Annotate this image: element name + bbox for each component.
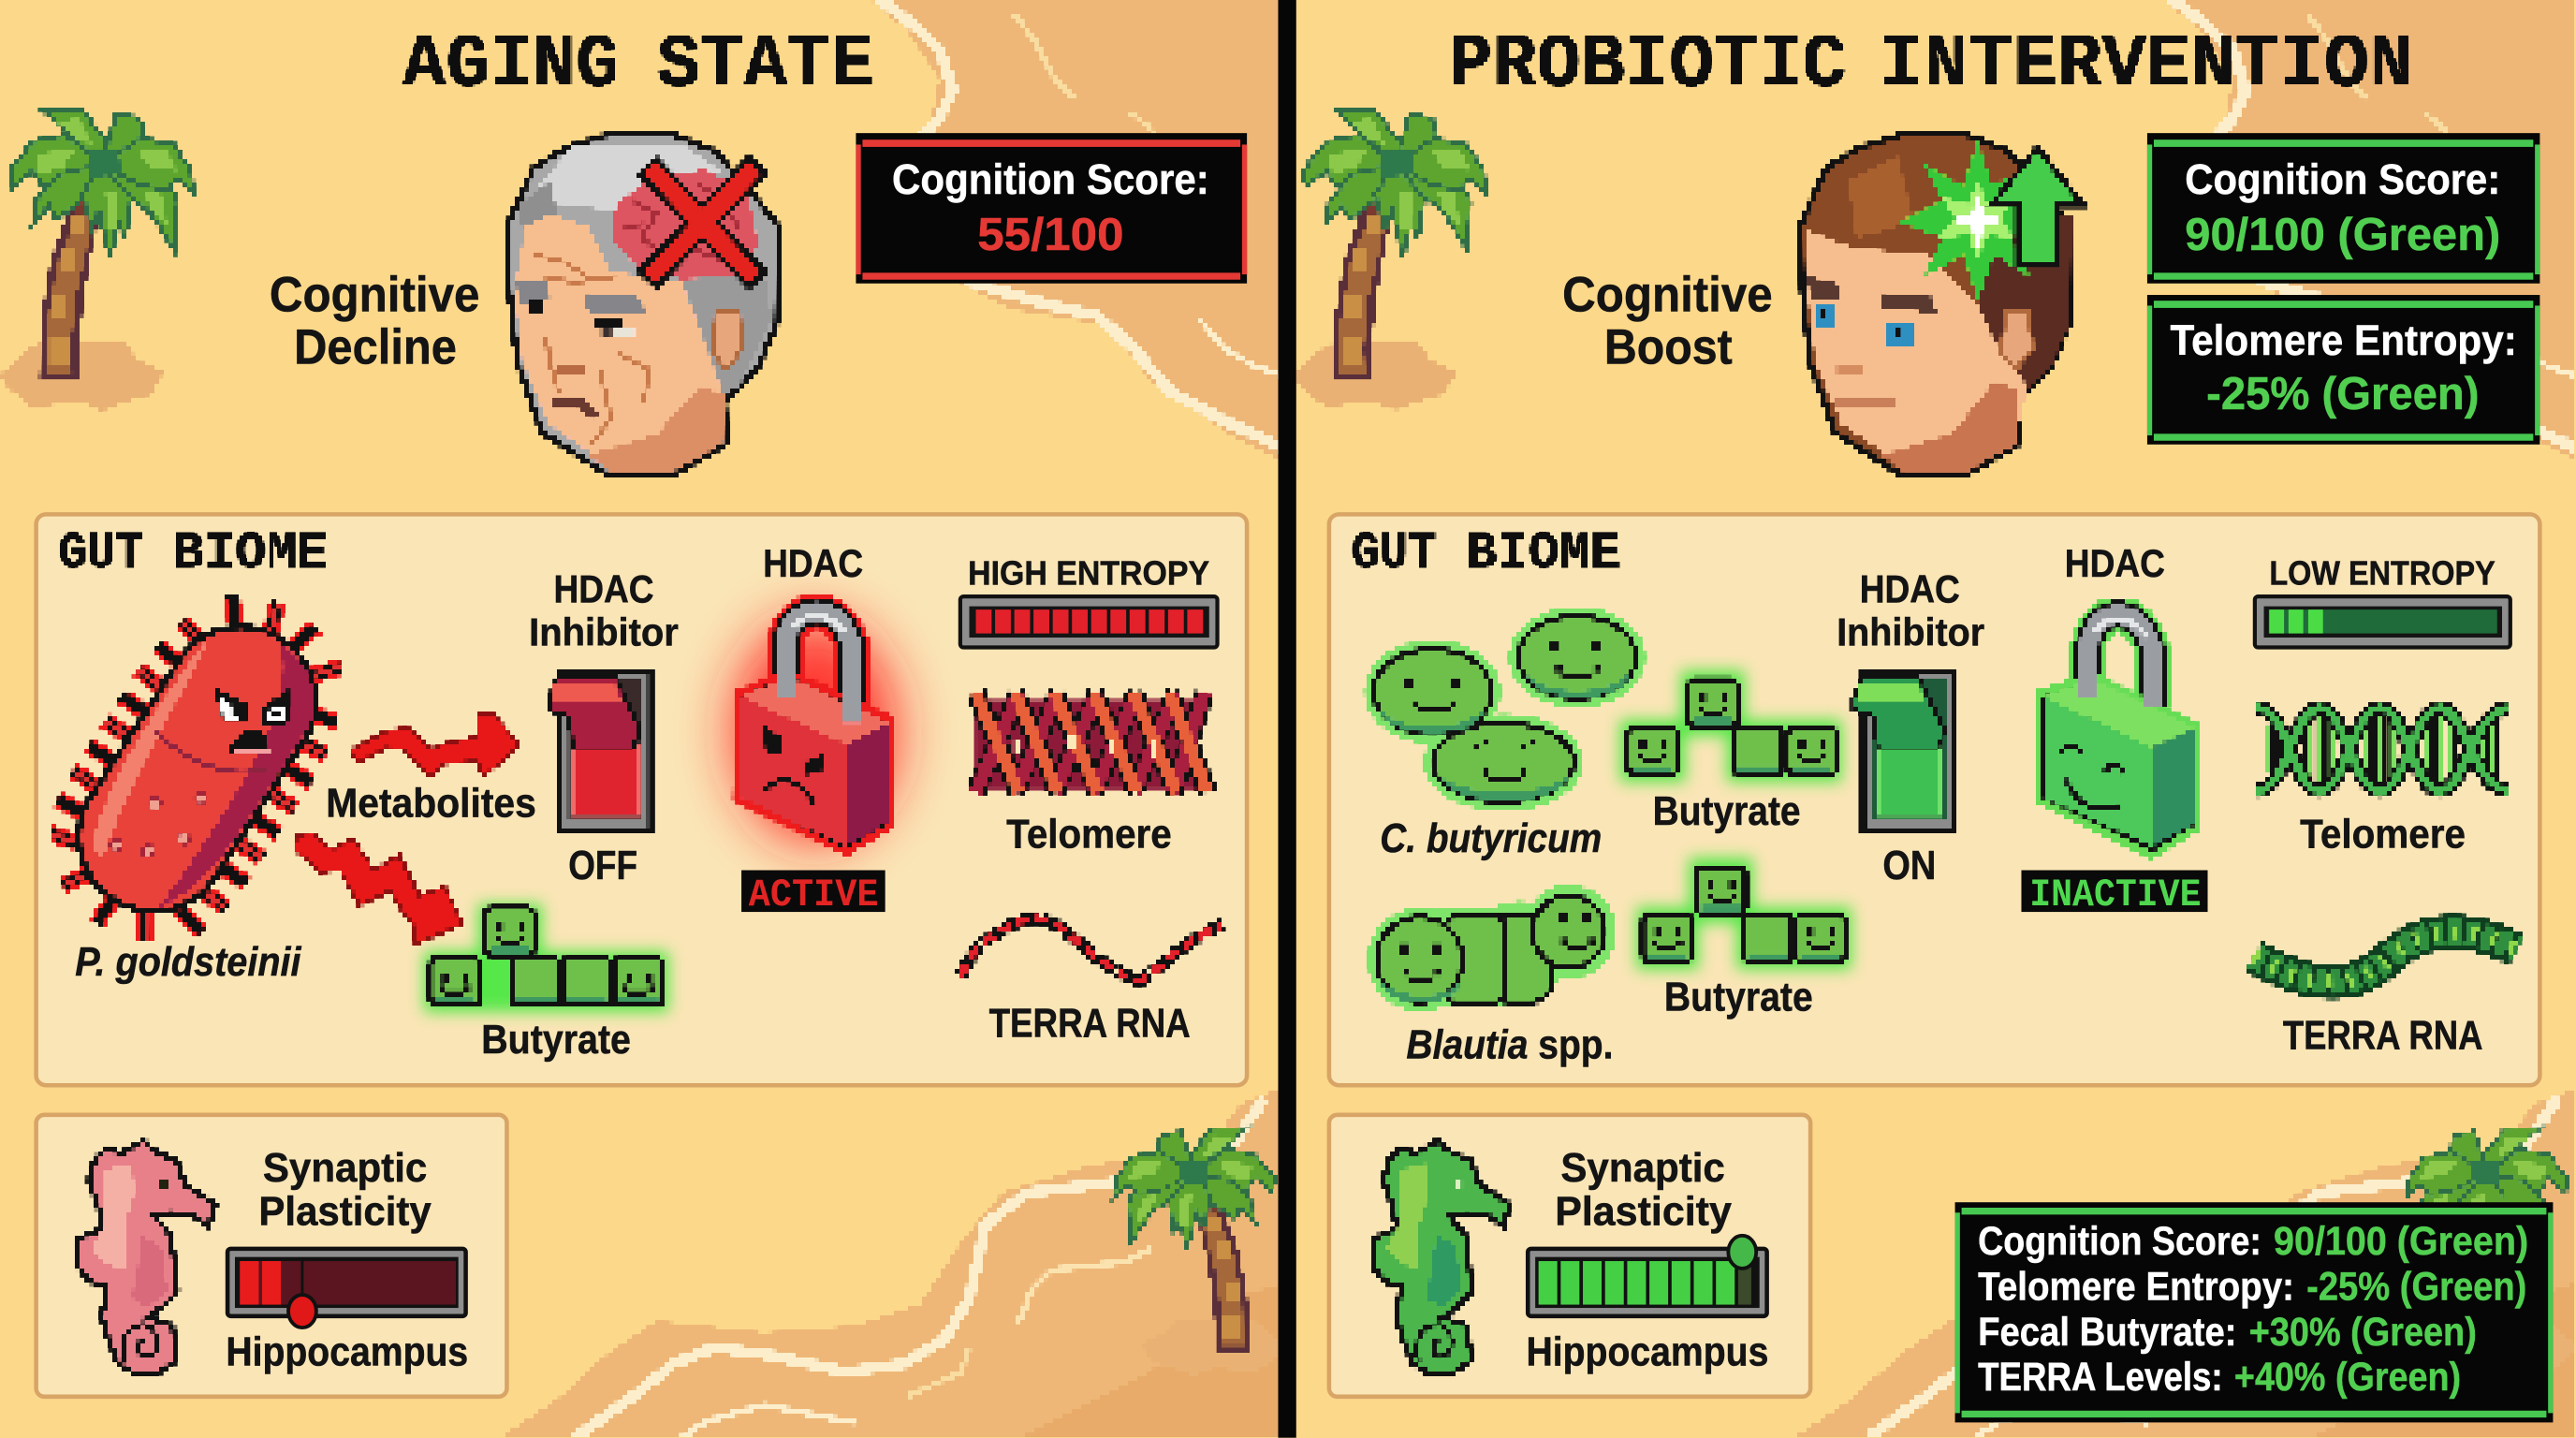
score card: cognition score 55/100: [856, 133, 1247, 284]
title: aging state: STATE: [657, 23, 874, 109]
label: blautia spp.: Blautia spp.: [1406, 1021, 1614, 1067]
summary box: intervention results: [1955, 1202, 2553, 1422]
glow: butyrate chains: [1620, 670, 1852, 970]
title: probiotic intervention: INTERVENTION: [1880, 23, 2413, 109]
label: butyrate: Butyrate: [481, 1017, 631, 1063]
label: on: ON: [1882, 843, 1936, 888]
score card: cognition score 90/100: Cognition Score:: [2185, 155, 2500, 203]
score card: telomere entropy -25%: Telomere Entropy:: [2170, 316, 2517, 364]
label: synaptic plasticity: Plasticity: [258, 1188, 432, 1234]
label: off: OFF: [568, 843, 637, 888]
heading: gut biome: BIOME: [173, 526, 328, 583]
summary box: intervention results: -25% (Green): [2306, 1264, 2526, 1309]
panel: gut biome aging: [10, 514, 1247, 1085]
glow: butyrate: [424, 903, 668, 1012]
label: synaptic plasticity: [258, 1145, 432, 1234]
summary box: intervention results: Cognition Score:: [1978, 1219, 2261, 1264]
heading: gut biome: GUT: [58, 526, 144, 583]
icon: broken red terra rna: [961, 918, 1222, 980]
icon: smiling green bacteria c. butyricum and blautia: [1373, 616, 1636, 1003]
panel: synaptic plasticity aging: [37, 1115, 506, 1397]
label: hdac: HDAC: [2065, 541, 2165, 585]
panel frame: [37, 514, 1247, 1085]
panel frame: [1329, 514, 2539, 1085]
score card: cognition score 90/100: 90/100 (Green): [2185, 210, 2500, 260]
label: hdac inhibitor: [1837, 567, 1984, 654]
label: cognitive decline: Cognitive: [270, 268, 479, 323]
heading: gut biome: [58, 526, 328, 583]
status badge: active: ACTIVE: [749, 873, 878, 917]
panel: synaptic plasticity intervention: [1329, 1115, 1810, 1397]
label: telomere: Telomere: [1006, 812, 1172, 858]
label: hippocampus: Hippocampus: [1526, 1328, 1768, 1374]
label: cognitive decline: Decline: [294, 320, 457, 375]
meter: low entropy bar: [2255, 596, 2510, 648]
meter: high plasticity bar: [1528, 1236, 1767, 1316]
score card: cognition score 55/100: 55/100: [977, 210, 1123, 260]
label: terra rna: TERRA RNA: [2283, 1013, 2482, 1059]
label: telomere: Telomere: [2300, 812, 2466, 858]
label: hdac: HDAC: [763, 541, 863, 585]
label: cognitive decline: [270, 268, 479, 375]
icon: old man head with crossed-out brain: [507, 135, 779, 475]
label: cognitive boost: Boost: [1604, 320, 1733, 375]
meter: high entropy bar: [960, 596, 1218, 648]
title: aging state: [402, 23, 874, 109]
score card: telomere entropy -25%: [2147, 295, 2539, 445]
icon: butyrate molecule chain: [431, 908, 663, 1005]
label: low entropy: LOW ENTROPY: [2269, 553, 2496, 592]
label: butyrate top: Butyrate: [1653, 788, 1801, 834]
panel frame: [37, 1115, 506, 1397]
summary box: intervention results: TERRA Levels:: [1978, 1355, 2223, 1400]
heading: gut biome: [1352, 526, 1621, 583]
icon: green toggle switch on: [1853, 670, 1954, 829]
icon: green seahorse: [1372, 1140, 1510, 1375]
label: terra rna: TERRA RNA: [989, 1000, 1191, 1046]
arrows: squiggly red arrows: [295, 714, 520, 945]
glow: red lock: [733, 620, 897, 843]
score card: telomere entropy -25%: -25% (Green): [2206, 369, 2479, 419]
title: probiotic intervention: [1448, 23, 2413, 109]
panel: probiotic intervention: [1329, 23, 2553, 1422]
icon: pink seahorse: [78, 1140, 215, 1375]
summary box: intervention results: +40% (Green): [2234, 1355, 2461, 1400]
summary box: intervention results: 90/100 (Green): [2274, 1219, 2528, 1264]
background: right beach with palm trees: [1288, 0, 2576, 1438]
icon: smiling green padlock inactive: [2039, 614, 2197, 856]
meter: low plasticity bar: [227, 1249, 466, 1328]
summary box: intervention results: Fecal Butyrate:: [1978, 1310, 2237, 1355]
label: p. goldsteinii: P. goldsteinii: [75, 939, 301, 985]
title: aging state: AGING: [402, 23, 620, 109]
icon: healthy green telomere and terra rna: [2254, 708, 2517, 982]
label: hdac inhibitor: Inhibitor: [529, 610, 679, 654]
icon: young man head with green burst and up arrow: [1801, 135, 2083, 475]
score card: cognition score 55/100: Cognition Score:: [892, 155, 1209, 203]
label: synaptic plasticity: Synaptic: [263, 1145, 427, 1191]
label: hdac inhibitor: HDAC: [553, 567, 654, 611]
panel frame: [1329, 1115, 1810, 1397]
label: hdac inhibitor: [529, 567, 679, 654]
title: probiotic intervention: PROBIOTIC: [1448, 23, 1847, 109]
heading: gut biome: BIOME: [1466, 526, 1621, 583]
label: synaptic plasticity: Synaptic: [1560, 1145, 1725, 1191]
label: hdac inhibitor: HDAC: [1860, 567, 1960, 611]
label: hdac inhibitor: Inhibitor: [1837, 610, 1984, 654]
summary box: intervention results: Telomere Entropy:: [1978, 1264, 2294, 1309]
summary box: intervention results: +30% (Green): [2249, 1310, 2477, 1355]
panel: gut biome intervention: [1329, 514, 2539, 1085]
label: synaptic plasticity: Plasticity: [1555, 1188, 1732, 1234]
label: hippocampus: Hippocampus: [226, 1328, 468, 1374]
icon: angry red padlock active: [736, 611, 892, 853]
status badge: inactive: INACTIVE: [2029, 873, 2201, 917]
icon: butyrate molecule chains: [1628, 680, 1845, 962]
label: c. butyricum: C. butyricum: [1380, 815, 1602, 861]
icon: frayed red telomere: [961, 694, 1222, 980]
icon: angry red bacterium p. goldsteinii: [10, 558, 384, 979]
label: metabolites: Metabolites: [326, 780, 536, 826]
heading: gut biome: GUT: [1352, 526, 1437, 583]
background: left beach with palm trees: [0, 0, 1288, 1438]
center divider: [1278, 0, 1296, 1438]
label: high entropy: HIGH ENTROPY: [968, 553, 1209, 592]
label: cognitive boost: Cognitive: [1562, 268, 1773, 323]
panel: aging state: [10, 23, 1247, 1397]
score card: cognition score 90/100: [2147, 133, 2539, 284]
icon: red toggle switch off: [549, 670, 651, 829]
label: synaptic plasticity: [1555, 1145, 1732, 1234]
label: butyrate bottom: Butyrate: [1664, 974, 1813, 1020]
label: cognitive boost: [1562, 268, 1773, 375]
